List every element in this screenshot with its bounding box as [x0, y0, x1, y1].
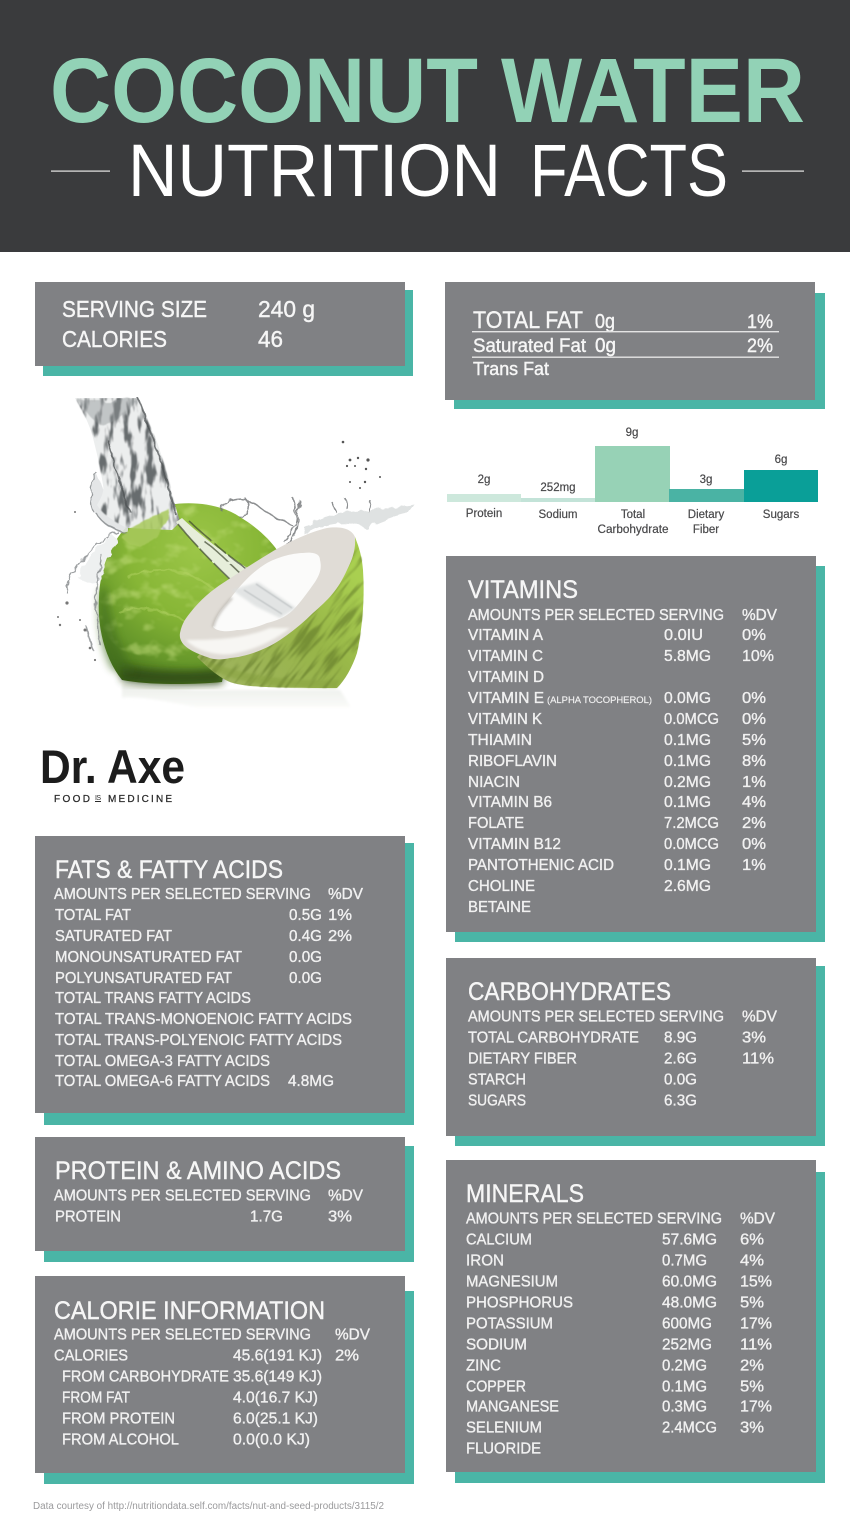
- table: minerals: 5%: [740, 1295, 764, 1312]
- table: fats: TOTAL OMEGA-3 FATTY ACIDS: [55, 1053, 270, 1070]
- table: vitamins: 0.2MG: [664, 774, 711, 791]
- table: fats: 0.5G: [289, 907, 322, 924]
- table: minerals: 5%: [740, 1379, 764, 1396]
- table: vitamins: 0%: [742, 690, 766, 707]
- table: protein: %DV: [328, 1188, 363, 1205]
- coconut flesh interior: [213, 553, 321, 631]
- table: vitamins: 0%: [742, 711, 766, 728]
- table: vitamins: BETAINE: [468, 899, 531, 916]
- table: minerals: MANGANESE: [466, 1399, 559, 1416]
- panel: serving size: 240 g: [258, 296, 315, 322]
- table: vitamins: RIBOFLAVIN: [468, 753, 557, 770]
- title: coconut water: [50, 40, 805, 142]
- table: calories: 35.6(149 KJ): [233, 1369, 322, 1386]
- table: minerals: POTASSIUM: [466, 1316, 553, 1333]
- table: protein: AMOUNTS PER SELECTED SERVING: [54, 1188, 311, 1205]
- bar chart: macronutrients: Total: [621, 509, 645, 521]
- table: vitamins: VITAMIN C: [468, 648, 543, 665]
- panel: calorie information: [35, 1276, 414, 1484]
- table: minerals: 57.6MG: [662, 1232, 717, 1249]
- table: fats: [54, 886, 363, 1090]
- bar chart: macronutrients: Sugars: [763, 509, 799, 521]
- table: calories: AMOUNTS PER SELECTED SERVING: [54, 1327, 311, 1344]
- table: carbohydrates: 8.9G: [664, 1030, 697, 1047]
- table: calories: %DV: [335, 1327, 370, 1344]
- table: minerals: 17%: [740, 1399, 772, 1416]
- illustration: coconuts with water splash: [57, 398, 437, 769]
- table: minerals: 600MG: [662, 1316, 712, 1333]
- table: minerals: 0.7MG: [662, 1253, 707, 1270]
- table: vitamins: FOLATE: [468, 815, 524, 832]
- panel: minerals: [446, 1160, 825, 1483]
- table: carbohydrates: DIETARY FIBER: [468, 1051, 577, 1068]
- table: minerals: SELENIUM: [466, 1420, 542, 1437]
- table: minerals: 6%: [740, 1232, 764, 1249]
- table: calories: FROM CARBOHYDRATE: [62, 1369, 229, 1386]
- table: carbohydrates: 0.0G: [664, 1072, 697, 1089]
- table: vitamins: 8%: [742, 753, 766, 770]
- table: protein: 3%: [328, 1209, 352, 1226]
- table: fats: %DV: [328, 886, 363, 903]
- table: minerals: IRON: [466, 1253, 504, 1270]
- table: protein: PROTEIN: [55, 1209, 121, 1226]
- table: vitamins: VITAMIN E: [468, 690, 544, 707]
- table: minerals: ZINC: [466, 1358, 501, 1375]
- table: vitamins: 0.1MG: [664, 732, 711, 749]
- table: vitamins: VITAMIN B6: [468, 794, 552, 811]
- table: calories: FROM PROTEIN: [62, 1411, 175, 1428]
- table: fats: MONOUNSATURATED FAT: [55, 949, 242, 966]
- table: vitamins: 0%: [742, 836, 766, 853]
- table: fats: SATURATED FAT: [55, 928, 172, 945]
- table: fats: AMOUNTS PER SELECTED SERVING: [54, 886, 311, 903]
- table: carbohydrates: 3%: [742, 1030, 766, 1047]
- bar chart: macronutrients: 2g: [478, 474, 490, 486]
- droplets left: [57, 477, 105, 661]
- panel: total fat: 0g: [595, 311, 615, 333]
- panel: total fat: Saturated Fat: [473, 336, 587, 357]
- table: minerals: [466, 1211, 775, 1458]
- table: carbohydrates: [468, 1009, 777, 1110]
- table: carbohydrates: 6.3G: [664, 1093, 697, 1110]
- table: minerals: CALCIUM: [466, 1232, 532, 1249]
- panel: total fat: [445, 282, 825, 409]
- left splash: [78, 535, 118, 583]
- table: calories: CALORIES: [54, 1348, 128, 1365]
- table: protein: [54, 1188, 363, 1226]
- table: vitamins: CHOLINE: [468, 878, 535, 895]
- bar chart: macronutrients: Fiber: [693, 524, 719, 536]
- table: minerals: COPPER: [466, 1379, 526, 1396]
- right splash: [220, 498, 370, 545]
- table: fats: 0.4G: [289, 928, 322, 945]
- bar chart: macronutrients: 6g: [775, 454, 787, 466]
- subtitle: nutrition facts: NUTRITION: [128, 129, 501, 212]
- table: vitamins: (ALPHA TOCOPHEROL): [547, 695, 652, 705]
- table: vitamins: 0%: [742, 627, 766, 644]
- table: fats: POLYUNSATURATED FAT: [55, 970, 232, 987]
- table: vitamins: 4%: [742, 794, 766, 811]
- table: carbohydrates: TOTAL CARBOHYDRATE: [468, 1030, 639, 1047]
- logo: Dr. Axe: Dr. Axe: [40, 740, 185, 793]
- table: vitamins: AMOUNTS PER SELECTED SERVING: [468, 607, 724, 624]
- green splash at stream impact: [120, 510, 170, 545]
- stream over coconut: [176, 518, 265, 590]
- table: fats: TOTAL TRANS FATTY ACIDS: [55, 990, 251, 1007]
- table: vitamins: 0.1MG: [664, 794, 711, 811]
- panel: total fat: 2%: [747, 336, 773, 357]
- table: fats: 0.0G: [289, 970, 322, 987]
- table: fats: 2%: [328, 928, 352, 945]
- table: vitamins: 0.0IU: [664, 627, 703, 644]
- table: vitamins: VITAMIN A: [468, 627, 543, 644]
- table: calories: FROM FAT: [62, 1390, 130, 1407]
- subtitle: nutrition facts: FACTS: [530, 129, 728, 212]
- whole green coconut: [99, 503, 277, 684]
- bar chart: macronutrients: Dietary: [688, 509, 724, 521]
- subtitle: nutrition facts: [51, 129, 804, 212]
- heading: minerals: MINERALS: [466, 1180, 584, 1208]
- heading: calories: CALORIE INFORMATION: [54, 1297, 325, 1325]
- title: coconut water: COCONUT: [50, 40, 478, 142]
- bar chart: macronutrients: Protein: [466, 508, 502, 520]
- title: coconut water: WATER: [501, 40, 805, 142]
- water stream: [75, 398, 180, 530]
- table: calories: 2%: [335, 1348, 359, 1365]
- bar chart: macronutrients: [447, 427, 818, 536]
- droplets right: [342, 441, 381, 489]
- footer: data source: Data courtesy of http://nutritiondata.self.com/facts/nut-and-seed-products/3115/2: [33, 1501, 384, 1512]
- panel: carbohydrates: [446, 958, 825, 1146]
- logo: Dr. Axe: IS: [95, 795, 101, 802]
- table: minerals: SODIUM: [466, 1337, 527, 1354]
- table: minerals: 4%: [740, 1253, 764, 1270]
- bar chart: macronutrients: Carbohydrate: [598, 524, 668, 536]
- cut half coconut shell: [197, 537, 364, 688]
- table: vitamins: 0.0MCG: [664, 711, 719, 728]
- table: fats: 4.8MG: [288, 1073, 334, 1090]
- table: calories: 6.0(25.1 KJ): [233, 1411, 318, 1428]
- table: minerals: 17%: [740, 1316, 772, 1333]
- header banner: [0, 0, 850, 252]
- table: fats: 0.0G: [289, 949, 322, 966]
- table: vitamins: 0.1MG: [664, 753, 711, 770]
- panel: total fat: 0g: [595, 335, 616, 357]
- table: vitamins: PANTOTHENIC ACID: [468, 857, 614, 874]
- logo: Dr. Axe: MEDICINE: [108, 794, 172, 805]
- table: calories: [54, 1327, 370, 1449]
- table: minerals: MAGNESIUM: [466, 1274, 558, 1291]
- table: vitamins: %DV: [742, 607, 777, 624]
- table: protein: 1.7G: [250, 1209, 283, 1226]
- coconut flesh rim: [180, 527, 355, 659]
- table: minerals: 252MG: [662, 1337, 712, 1354]
- table: calories: FROM ALCOHOL: [62, 1432, 179, 1449]
- panel: serving size: 46: [258, 326, 283, 352]
- table: vitamins: 1%: [742, 774, 766, 791]
- table: vitamins: 0.1MG: [664, 857, 711, 874]
- table: vitamins: 2%: [742, 815, 766, 832]
- table: vitamins: VITAMIN D: [468, 669, 544, 686]
- table: fats: 1%: [328, 907, 352, 924]
- table: carbohydrates: STARCH: [468, 1072, 526, 1089]
- table: minerals: 0.1MG: [662, 1379, 707, 1396]
- table: vitamins: 10%: [742, 648, 774, 665]
- bar chart: macronutrients: 252mg: [540, 482, 576, 494]
- table: vitamins: 2.6MG: [664, 878, 711, 895]
- panel: total fat: TOTAL FAT: [473, 307, 583, 334]
- panel: total fat: 1%: [747, 312, 773, 333]
- table: vitamins: 7.2MCG: [664, 815, 719, 832]
- water pouring in: [232, 582, 296, 618]
- table: minerals: 2%: [740, 1358, 764, 1375]
- panel: serving size: SERVING SIZE: [62, 296, 207, 322]
- table: fats: TOTAL OMEGA-6 FATTY ACIDS: [55, 1073, 270, 1090]
- table: fats: TOTAL TRANS-POLYENOIC FATTY ACIDS: [55, 1032, 342, 1049]
- panel: protein and amino acids: [35, 1137, 414, 1262]
- table: carbohydrates: %DV: [742, 1009, 777, 1026]
- bar chart: macronutrients: 3g: [700, 474, 712, 486]
- heading: fats: FATS & FATTY ACIDS: [55, 856, 283, 884]
- table: vitamins: 0.0MG: [664, 690, 711, 707]
- table: vitamins: 1%: [742, 857, 766, 874]
- table: minerals: 3%: [740, 1420, 764, 1437]
- panel: vitamins: [446, 556, 825, 942]
- bar chart: macronutrients: Sodium: [538, 509, 578, 521]
- table: fats: TOTAL FAT: [55, 907, 131, 924]
- table: carbohydrates: 2.6G: [664, 1051, 697, 1068]
- shell fibre texture: [124, 456, 437, 769]
- table: vitamins: THIAMIN: [468, 732, 532, 749]
- table: vitamins: 5.8MG: [664, 648, 711, 665]
- heading: carbohydrates: CARBOHYDRATES: [468, 978, 671, 1006]
- table: minerals: 60.0MG: [662, 1274, 717, 1291]
- table: minerals: FLUORIDE: [466, 1441, 541, 1458]
- logo: Dr. Axe: FOOD: [54, 794, 90, 805]
- table: minerals: %DV: [740, 1211, 775, 1228]
- table: minerals: PHOSPHORUS: [466, 1295, 573, 1312]
- table: vitamins: [468, 607, 777, 916]
- table: minerals: 48.0MG: [662, 1295, 717, 1312]
- table: calories: 45.6(191 KJ): [233, 1348, 322, 1365]
- table: vitamins: 5%: [742, 732, 766, 749]
- table: calories: 4.0(16.7 KJ): [233, 1390, 318, 1407]
- table: minerals: 0.2MG: [662, 1358, 707, 1375]
- table: calories: 0.0(0.0 KJ): [233, 1432, 310, 1449]
- table: minerals: AMOUNTS PER SELECTED SERVING: [466, 1211, 722, 1228]
- table: minerals: 15%: [740, 1274, 772, 1291]
- table: minerals: 2.4MCG: [662, 1420, 717, 1437]
- table: vitamins: VITAMIN B12: [468, 836, 561, 853]
- heading: protein: PROTEIN & AMINO ACIDS: [55, 1157, 341, 1185]
- table: minerals: 11%: [740, 1337, 772, 1354]
- table: carbohydrates: AMOUNTS PER SELECTED SERVING: [468, 1009, 724, 1026]
- table reflection: [122, 684, 351, 707]
- panel: fats and fatty acids: [35, 836, 414, 1125]
- bar chart: macronutrients: 9g: [626, 427, 638, 439]
- table: vitamins: NIACIN: [468, 774, 520, 791]
- table: vitamins: 0.0MCG: [664, 836, 719, 853]
- panel: total fat: Trans Fat: [473, 359, 549, 379]
- table: carbohydrates: 11%: [742, 1051, 774, 1068]
- table: vitamins: VITAMIN K: [468, 711, 542, 728]
- table: fats: TOTAL TRANS-MONOENOIC FATTY ACIDS: [55, 1011, 352, 1028]
- table: minerals: 0.3MG: [662, 1399, 707, 1416]
- table: carbohydrates: SUGARS: [468, 1093, 526, 1110]
- panel: serving size: [35, 282, 413, 376]
- heading: vitamins: VITAMINS: [468, 576, 578, 604]
- panel: serving size: CALORIES: [62, 326, 167, 352]
